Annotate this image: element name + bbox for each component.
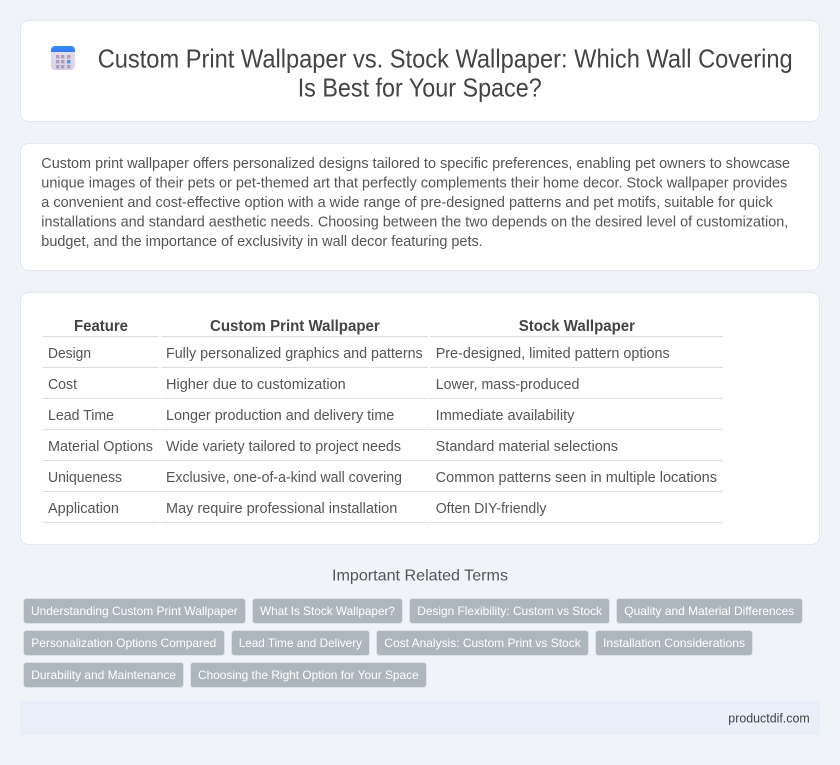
table row: application: May require professional installation: [166, 501, 397, 517]
table row: uniqueness: Uniqueness: [48, 470, 122, 486]
text block: summary paragraph: unique images of their pets or pet-themed art that perfectly complements their home decor. Stock wallpaper provides: [41, 176, 787, 192]
table row: cost: [43, 377, 723, 399]
title: Is Best for Your Space?: [298, 74, 542, 102]
tag: [190, 662, 426, 688]
table row: application: [43, 501, 723, 523]
table header row: Stock Wallpaper: [519, 318, 635, 335]
table row: lead time: Immediate availability: [436, 408, 575, 424]
table row: design: Fully personalized graphics and patterns: [166, 346, 423, 362]
tag: [24, 662, 184, 688]
table row: lead time: Longer production and delivery time: [166, 408, 394, 424]
panel: comparison table: [20, 292, 820, 544]
table row: uniqueness: Exclusive, one-of-a-kind wall covering: [166, 470, 402, 486]
text block: summary paragraph: [41, 156, 790, 250]
panel: header: [20, 20, 820, 122]
tag: Quality and Material Differences: [624, 604, 794, 618]
tag: [232, 630, 370, 656]
title: Custom Print Wallpaper vs. Stock Wallpaper: Which Wall Covering: [98, 46, 793, 74]
table row: design: Pre-designed, limited pattern options: [436, 346, 670, 362]
tag: Design Flexibility: Custom vs Stock: [417, 604, 603, 618]
text block: summary paragraph: budget, and the importance of exclusivity in wall decor featuring pets.: [41, 234, 483, 250]
tag: [376, 630, 588, 656]
table row: material options: [43, 439, 723, 461]
table row: lead time: Lead Time: [48, 408, 114, 424]
table header row: [43, 318, 723, 337]
table row: material options: Wide variety tailored to project needs: [166, 439, 401, 455]
footer: [20, 701, 820, 735]
tag: [252, 598, 402, 624]
table row: application: Application: [48, 501, 119, 517]
heading: important related terms: Important Related Terms: [332, 568, 508, 584]
text block: summary paragraph: a convenient and cost-effective option with a wide range of pre-designed patterns and pet motifs, suitable for quick: [41, 195, 774, 211]
table header row: Feature: [74, 318, 128, 335]
table row: design: Design: [48, 346, 91, 362]
text block: summary paragraph: Custom print wallpaper offers personalized designs tailored to specific preferences, enabling pet owners to showcase: [41, 156, 790, 172]
tag: [616, 598, 802, 624]
tag: [410, 598, 610, 624]
table row: design: [43, 346, 723, 368]
tag: [24, 598, 246, 624]
tag: [24, 630, 224, 656]
table row: cost: Higher due to customization: [166, 377, 346, 393]
tag: Installation Considerations: [603, 636, 745, 650]
panel: summary: [20, 144, 820, 270]
tag: Personalization Options Compared: [31, 636, 216, 650]
icon: calendar grid: [51, 46, 75, 70]
table header row: Custom Print Wallpaper: [210, 318, 380, 335]
tag: Lead Time and Delivery: [239, 636, 362, 650]
table row: lead time: [43, 408, 723, 430]
table row: cost: Cost: [48, 377, 77, 393]
tag: Understanding Custom Print Wallpaper: [31, 604, 238, 618]
table row: material options: Material Options: [48, 439, 153, 455]
tag: Durability and Maintenance: [31, 668, 176, 682]
footer source text: productdif.com: [728, 710, 810, 725]
tag: [596, 630, 752, 656]
table row: application: Often DIY-friendly: [436, 501, 547, 517]
table row: material options: Standard material selections: [436, 439, 618, 455]
tag: Cost Analysis: Custom Print vs Stock: [384, 636, 582, 650]
table row: uniqueness: [43, 470, 723, 492]
title: [98, 46, 793, 102]
table row: cost: Lower, mass-produced: [436, 377, 579, 393]
table row: uniqueness: Common patterns seen in multiple locations: [436, 470, 717, 486]
text block: summary paragraph: installations and standard aesthetic needs. Choosing between the two depends on the desired level of customization,: [41, 214, 788, 230]
tag: What Is Stock Wallpaper?: [260, 604, 395, 618]
tag: Choosing the Right Option for Your Space: [198, 668, 419, 682]
related term tags: [24, 598, 802, 688]
